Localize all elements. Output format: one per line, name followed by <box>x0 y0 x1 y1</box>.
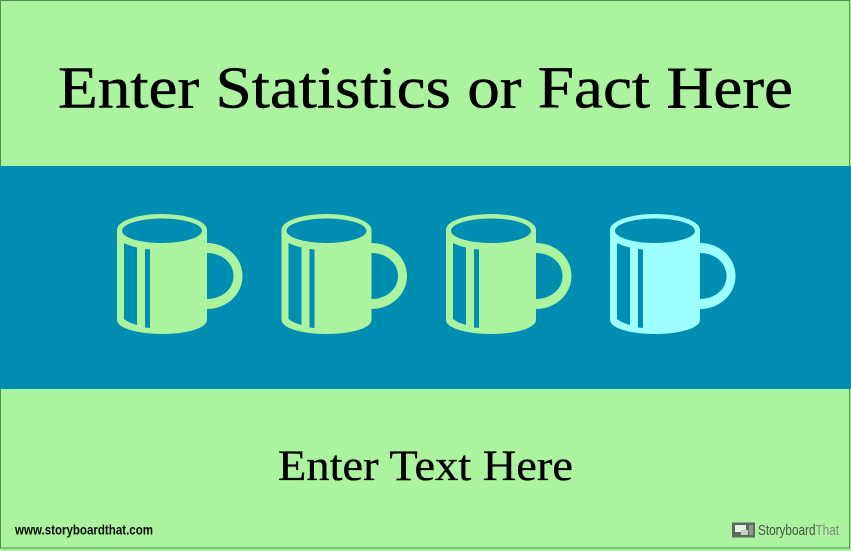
logo: StoryboardThat <box>732 522 839 539</box>
icon: mug 4 highlighted <box>610 214 736 334</box>
title: Enter Statistics or Fact Here <box>58 54 793 120</box>
icon: mug 1 <box>117 214 242 334</box>
panel: mug band <box>0 166 851 389</box>
icon: mug 2 <box>282 214 407 334</box>
icon: mug 3 <box>446 214 572 334</box>
logo: StoryboardThat: StoryboardThat <box>758 523 839 539</box>
text block: Enter Text Here <box>278 443 573 490</box>
website url: www.storyboardthat.com <box>14 522 153 538</box>
